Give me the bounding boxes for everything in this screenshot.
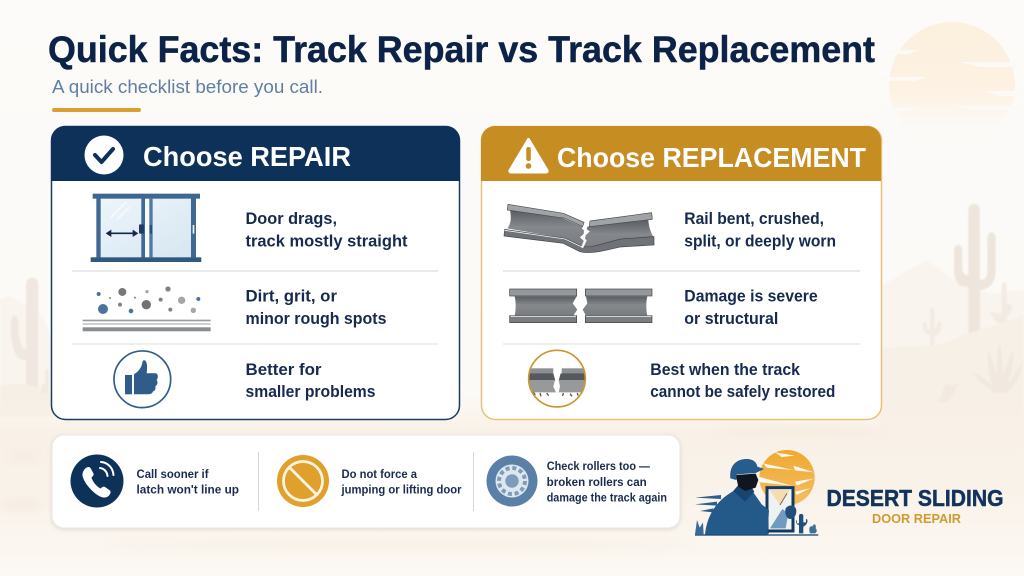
icon: check circle <box>84 136 124 174</box>
tip text: call sooner: Call sooner if <box>136 469 209 481</box>
repair text: smaller problems: Better for <box>246 361 322 379</box>
tip text: call sooner: latch won't line up <box>136 484 239 496</box>
background: sun <box>880 22 1024 148</box>
subtitle: A quick checklist before you call. <box>52 77 323 97</box>
panel: replacement <box>481 126 882 420</box>
logo wordmark: DESERT SLIDING <box>826 485 1004 511</box>
repair text: dirt and grit: Dirt, grit, or <box>246 288 338 306</box>
icon: thumbs up <box>114 351 171 408</box>
panel: bottom tips <box>52 435 680 528</box>
icon: circled track crack <box>528 350 587 407</box>
replacement text: cannot be restored: Best when the track <box>650 361 801 379</box>
icon: dirt and grit on track <box>83 286 211 331</box>
tip text: call sooner <box>136 469 239 496</box>
replacement text: severe damage <box>684 288 818 328</box>
repair text: dirt and grit <box>246 288 386 328</box>
tip text: do not force: jumping or lifting door <box>341 484 462 496</box>
panel header band <box>51 126 460 181</box>
replacement text: rail bent: split, or deeply worn <box>684 232 836 250</box>
tip text: check rollers: damage the track again <box>547 492 667 504</box>
logo tagline: DOOR REPAIR <box>872 512 961 526</box>
replacement text: rail bent: Rail bent, crushed, <box>684 210 824 228</box>
tip text: do not force <box>341 469 462 496</box>
icon: warning triangle <box>510 140 547 172</box>
replacement text: rail bent <box>684 210 836 250</box>
logo <box>695 450 1004 536</box>
icon: sliding door <box>91 194 201 262</box>
panel card <box>52 126 460 420</box>
replacement heading: Choose REPLACEMENT <box>557 142 866 173</box>
replacement text: cannot be restored: cannot be safely restored <box>650 383 835 401</box>
replacement text: severe damage: Damage is severe <box>684 288 818 306</box>
icon: roller bearing <box>486 456 538 506</box>
repair text: door drags: Door drags, <box>246 210 337 228</box>
repair text: smaller problems: smaller problems <box>246 383 376 401</box>
repair text: door drags <box>246 210 408 250</box>
repair text: smaller problems <box>246 361 376 401</box>
icon: no symbol <box>277 455 329 507</box>
tips card <box>52 435 680 528</box>
background: desert right <box>880 204 1024 440</box>
replacement text: severe damage: or structural <box>684 310 778 328</box>
panel: repair <box>51 126 460 420</box>
tip text: check rollers: Check rollers too — <box>547 461 650 473</box>
icon: split rail <box>510 289 652 323</box>
icon: bent broken rail <box>504 204 654 253</box>
panel header band <box>481 126 881 181</box>
background: desert left <box>0 277 53 417</box>
repair text: door drags: track mostly straight <box>246 232 408 250</box>
background: sand band <box>0 395 1024 576</box>
panel card <box>482 126 882 420</box>
replacement text: cannot be restored <box>650 361 835 401</box>
logo mark: technician with door frame <box>695 450 818 536</box>
title: Quick Facts: Track Repair vs Track Replacement <box>48 29 875 70</box>
repair heading: Choose REPAIR <box>143 141 351 172</box>
tip text: check rollers <box>547 461 667 504</box>
accent underline <box>52 108 141 112</box>
tip text: do not force: Do not force a <box>342 469 418 481</box>
repair text: dirt and grit: minor rough spots <box>246 310 386 328</box>
icon: phone <box>70 454 124 508</box>
tip text: check rollers: broken rollers can <box>547 477 647 489</box>
